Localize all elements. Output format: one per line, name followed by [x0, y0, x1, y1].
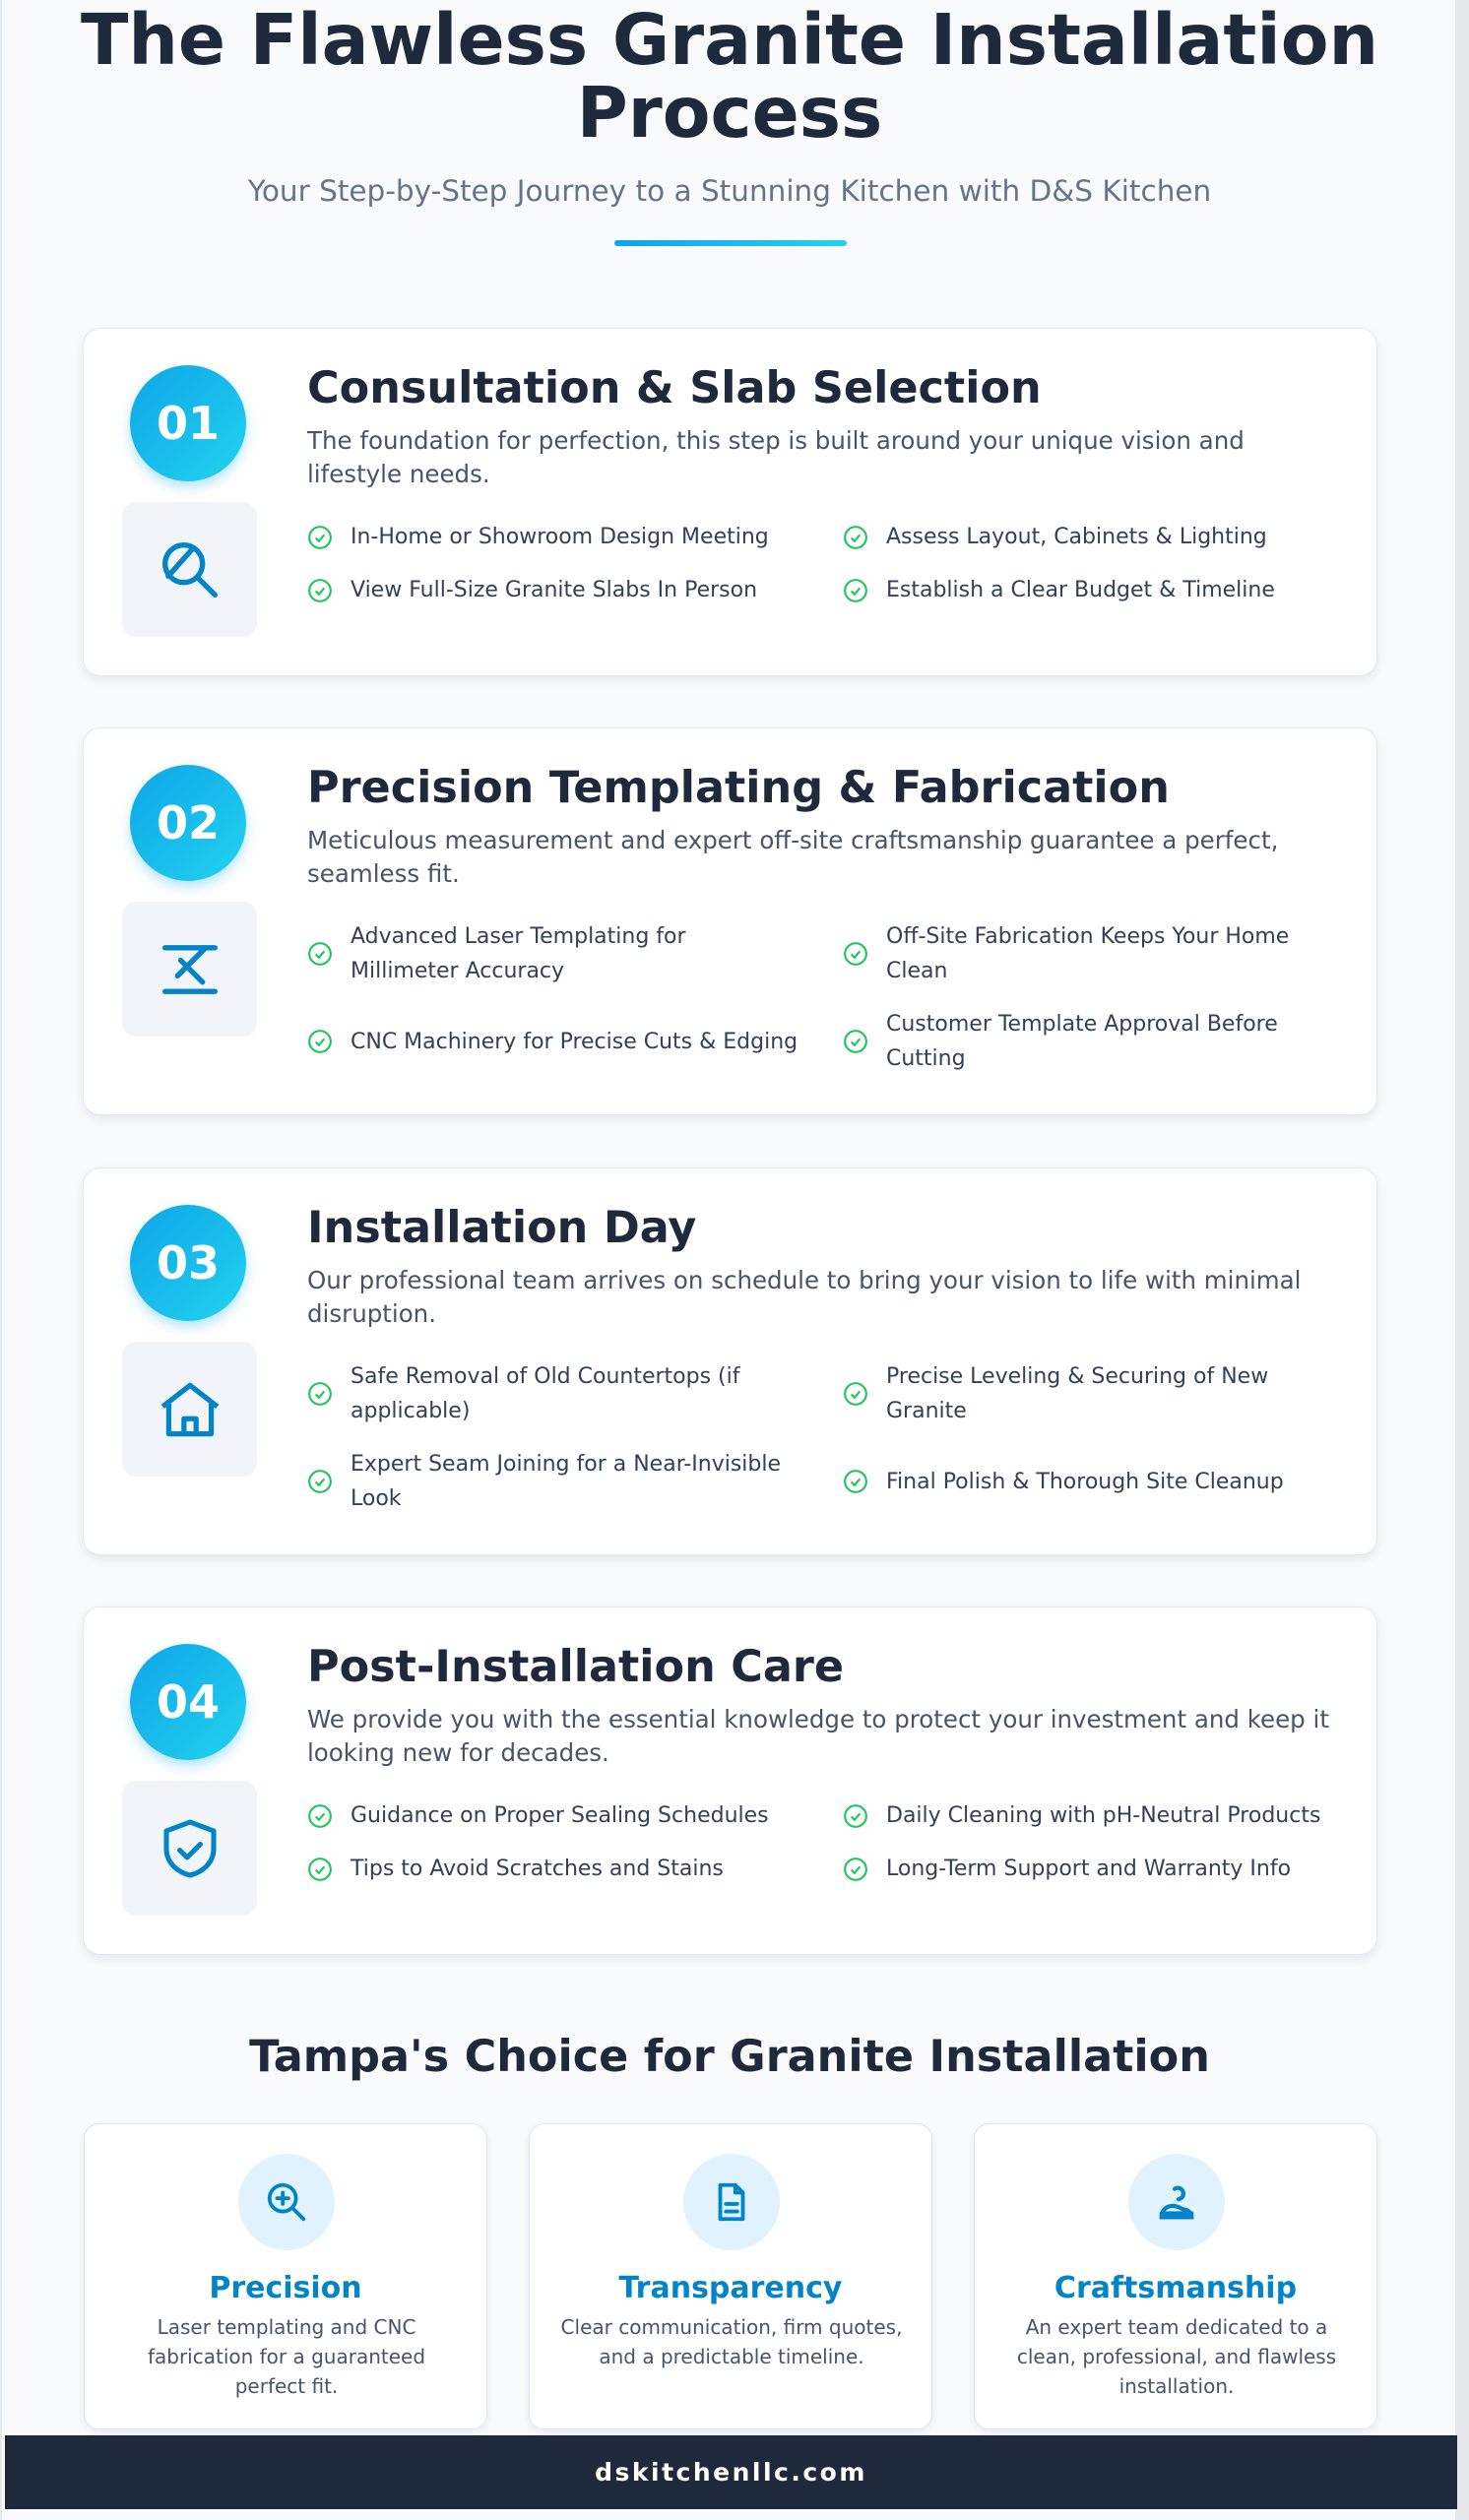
panel: transparency	[529, 2123, 932, 2429]
bullet list: Long-Term Support and Warranty Info	[886, 1857, 1291, 1881]
card text: An expert team dedicated to a clean, professional, and flawless installation.	[1017, 2315, 1336, 2398]
heading: Consultation & Slab Selection	[307, 363, 1042, 413]
bullet list: In-Home or Showroom Design Meeting	[351, 525, 769, 549]
bullet list: Off-Site Fabrication Keeps Your Home	[886, 924, 1289, 949]
bullet list: Advanced Laser Templating for	[351, 924, 686, 949]
icon: template cut	[122, 902, 257, 1037]
card title: Craftsmanship	[1054, 2271, 1297, 2305]
footer: dskitchenllc.com	[595, 2458, 867, 2487]
bullet list	[308, 1364, 1284, 1511]
card text: Laser templating and CNC fabrication for a guaranteed perfect fit.	[148, 2315, 425, 2398]
icon: magnifier	[122, 502, 257, 637]
section heading: Tampa's Choice for Granite Installation	[249, 2032, 1210, 2082]
bullet list: Cutting	[886, 1046, 966, 1071]
bullet list: Assess Layout, Cabinets & Lighting	[886, 525, 1267, 549]
title: The Flawless Granite Installation	[81, 0, 1378, 81]
footer	[5, 2435, 1457, 2509]
bullet list: Final Polish & Thorough Site Cleanup	[886, 1469, 1284, 1494]
bullet list: applicable)	[351, 1399, 470, 1423]
step number 01	[130, 365, 246, 481]
step number 02	[130, 765, 246, 881]
card title: Precision	[209, 2271, 362, 2305]
bullet list: Customer Template Approval Before	[886, 1012, 1278, 1037]
heading: Installation Day	[307, 1203, 696, 1253]
bullet list	[308, 1803, 1320, 1881]
icon: worker	[1128, 2154, 1225, 2250]
bullet list	[308, 924, 1289, 1071]
bullet list: Precise Leveling & Securing of New	[886, 1364, 1268, 1389]
title	[81, 0, 1378, 154]
panel: step 2	[83, 727, 1377, 1115]
bullet list: View Full-Size Granite Slabs In Person	[351, 578, 757, 602]
icon: document	[683, 2154, 780, 2250]
panel: step 4	[83, 1606, 1377, 1955]
bullet list: Safe Removal of Old Countertops (if	[351, 1364, 740, 1389]
card text: Clear communication, firm quotes, and a predictable timeline.	[561, 2315, 902, 2368]
description: The foundation for perfection, this step is built around your unique vision and lifestyle needs.	[307, 426, 1245, 488]
bullet list	[308, 525, 1275, 602]
step number 01: 01	[157, 397, 220, 450]
heading: Post-Installation Care	[307, 1642, 844, 1692]
bullet list: Granite	[886, 1399, 967, 1423]
bullet list: Expert Seam Joining for a Near-Invisible	[351, 1452, 781, 1477]
bullet list: CNC Machinery for Precise Cuts & Edging	[351, 1030, 798, 1053]
heading: Precision Templating & Fabrication	[307, 763, 1170, 813]
step number 03: 03	[157, 1236, 220, 1290]
bullet list: Establish a Clear Budget & Timeline	[886, 578, 1275, 602]
icon: zoom in	[238, 2154, 335, 2250]
panel: step 3	[83, 1167, 1377, 1555]
panel: step 1	[83, 328, 1377, 676]
bullet list: Guidance on Proper Sealing Schedules	[351, 1803, 769, 1828]
subtitle: Your Step-by-Step Journey to a Stunning Kitchen with D&S Kitchen	[248, 174, 1211, 208]
icon: house	[122, 1342, 257, 1477]
step number 04	[130, 1644, 246, 1760]
bullet list: Daily Cleaning with pH-Neutral Products	[886, 1803, 1320, 1828]
step number 02: 02	[157, 796, 220, 850]
panel: precision	[84, 2123, 487, 2429]
icon: shield	[122, 1781, 257, 1916]
accent bar	[614, 240, 847, 246]
bullet list: Clean	[886, 959, 947, 983]
bullet list: Look	[351, 1486, 402, 1511]
description: Meticulous measurement and expert off-site craftsmanship guarantee a perfect, seamless fit.	[307, 826, 1278, 888]
panel: craftsmanship	[974, 2123, 1377, 2429]
title: Process	[577, 72, 882, 154]
description: We provide you with the essential knowledge to protect your investment and keep it looking new for decades.	[307, 1705, 1329, 1767]
bullet list: Millimeter Accuracy	[351, 959, 564, 983]
step number 04: 04	[157, 1675, 220, 1729]
description: Our professional team arrives on schedule to bring your vision to life with minimal disruption.	[307, 1266, 1302, 1328]
card title: Transparency	[618, 2271, 842, 2305]
bullet list: Tips to Avoid Scratches and Stains	[351, 1857, 724, 1881]
step number 03	[130, 1205, 246, 1321]
